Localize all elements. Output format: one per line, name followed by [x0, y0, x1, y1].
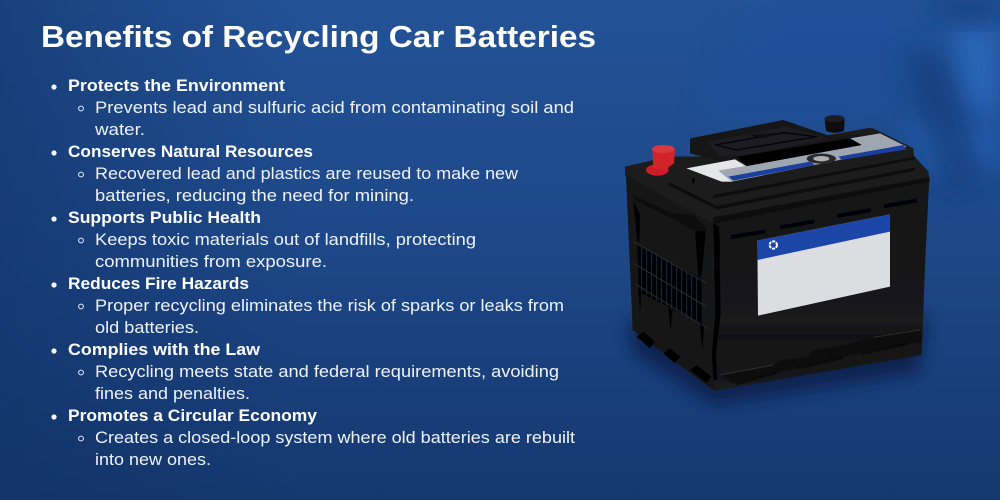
lid blue stripes [728, 145, 907, 181]
benefit: conserves natural resources: Recovered lead and plastics are reused to make new [95, 164, 519, 183]
benefit: reduces fire hazards [51, 274, 564, 337]
battery body side [626, 175, 715, 391]
top rim shadow [713, 177, 929, 224]
front vent slots [731, 198, 917, 239]
benefit: complies with the law: Recycling meets state and federal requirements, avoiding [95, 362, 559, 381]
benefits list [51, 76, 575, 469]
battery body front [713, 177, 929, 391]
benefit: reduces fire hazards: Reduces Fire Hazards [68, 274, 249, 293]
title: Benefits of Recycling Car Batteries [41, 19, 596, 54]
benefit: supports public health: Supports Public Health [68, 208, 261, 227]
benefit: supports public health [51, 208, 476, 271]
top deck [625, 155, 930, 224]
lid handle [690, 120, 863, 165]
benefit: promotes a circular economy: into new ones. [95, 450, 211, 469]
benefit: promotes a circular economy [51, 406, 575, 469]
benefit: conserves natural resources [51, 142, 519, 205]
positive terminal [646, 145, 675, 176]
lid notch [692, 178, 695, 186]
lid grey label strip [687, 133, 907, 182]
benefit: supports public health: Keeps toxic materials out of landfills, protecting [95, 230, 476, 249]
benefit: protects the environment: Protects the Environment [68, 76, 285, 95]
benefit: protects the environment [51, 76, 574, 139]
benefit: conserves natural resources: Conserves Natural Resources [68, 142, 313, 161]
benefit: protects the environment: Prevents lead and sulfuric acid from contaminating soil and [95, 98, 574, 117]
lid vent cap [807, 154, 836, 164]
benefit: complies with the law [51, 340, 559, 403]
benefit: promotes a circular economy: Promotes a Circular Economy [68, 406, 318, 425]
benefit: protects the environment: water. [94, 120, 145, 139]
front corner seam [712, 223, 721, 380]
benefit: reduces fire hazards: Proper recycling eliminates the risk of sparks or leaks from [95, 296, 564, 315]
lid black recess [737, 138, 862, 166]
lid [668, 128, 915, 209]
benefit: reduces fire hazards: old batteries. [95, 318, 199, 337]
negative terminal [825, 115, 845, 133]
side ribbed panel [633, 193, 707, 352]
icon: recycling symbol [770, 241, 777, 249]
battery illustration [625, 115, 930, 405]
benefit: promotes a circular economy: Creates a closed-loop system where old batteries are rebuilt [95, 428, 575, 447]
base feet [637, 330, 922, 384]
benefit: conserves natural resources: batteries, reducing the need for mining. [95, 186, 414, 205]
benefit: complies with the law: Complies with the Law [68, 340, 261, 359]
benefit: complies with the law: fines and penalties. [95, 384, 250, 403]
battery shadow [628, 317, 928, 405]
lid white patch [687, 159, 745, 182]
benefit: supports public health: communities from exposure. [95, 252, 327, 271]
front label [757, 214, 890, 316]
